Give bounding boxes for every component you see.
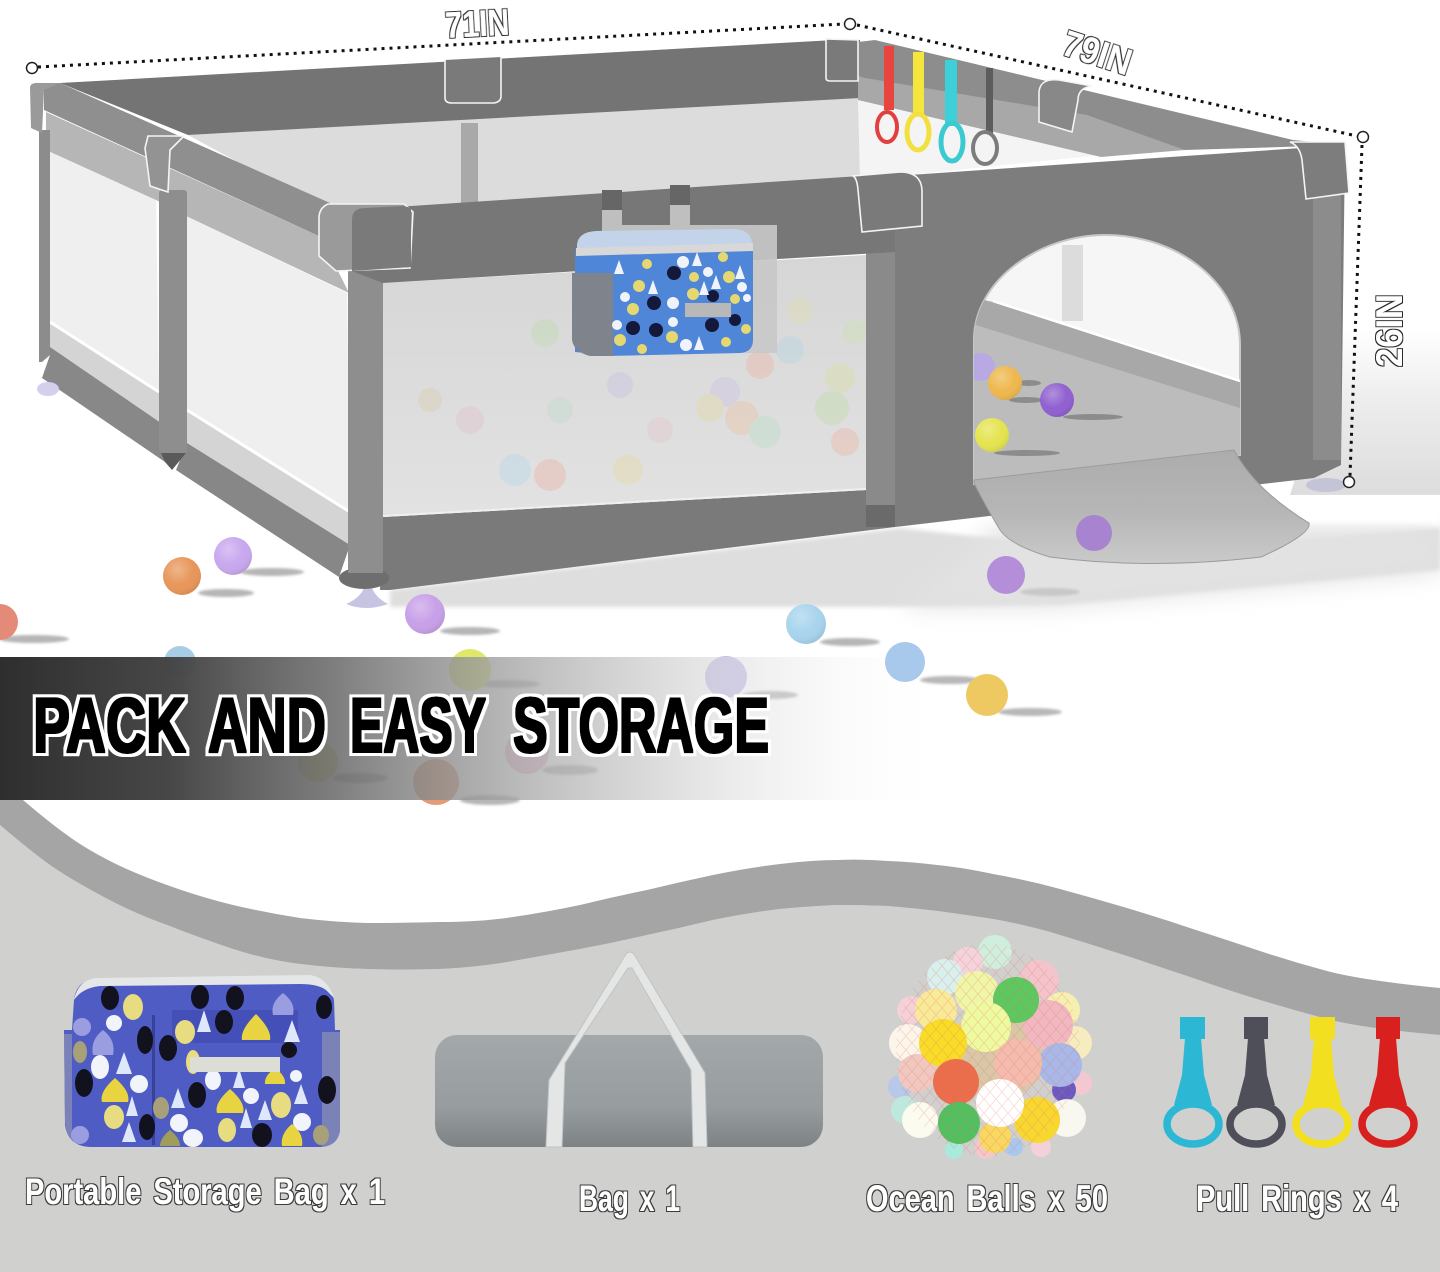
- bag lid: [577, 229, 752, 250]
- clip: right corner: [1290, 142, 1349, 199]
- door panel: [895, 145, 1345, 527]
- end point markers: [26, 18, 1368, 488]
- floor shadow around playpen: [390, 330, 1440, 607]
- wave: dark grey band: [0, 800, 1440, 1035]
- left near dark band: [176, 443, 350, 577]
- back wall top rail: [60, 40, 860, 135]
- depth label: 79IN: [1058, 23, 1137, 83]
- clip: back right: [826, 39, 858, 81]
- teal hanging ring: [941, 60, 963, 161]
- left rail light strip: [46, 112, 349, 293]
- back mesh wall: [188, 97, 860, 212]
- storage bag window: [606, 225, 777, 353]
- ball shadows: [0, 568, 1080, 805]
- floor through door: [974, 325, 1240, 480]
- dotted lines: [38, 24, 1362, 476]
- right wall inside rail: [858, 40, 1345, 150]
- storage bag side pockets: [64, 1032, 340, 1147]
- label: portable storage bag: Portable Storage Bag x 1: [25, 1171, 385, 1212]
- red hanging ring: [877, 46, 897, 142]
- item: ocean ball pile: [888, 935, 1092, 1159]
- clip: back rail middle: [445, 57, 501, 103]
- near foot suction: [346, 588, 388, 608]
- far mesh post through door: [1062, 245, 1083, 321]
- loose balls on floor: [0, 537, 1080, 805]
- left far light strip: [50, 322, 161, 423]
- left centre post: [159, 190, 187, 453]
- teal pull ring: [1167, 1017, 1219, 1144]
- ball on flap: [1076, 515, 1112, 551]
- front panel lower band: [380, 490, 895, 590]
- label: ocean balls: Ocean Balls x 50: [866, 1178, 1108, 1219]
- balls through door: [967, 353, 1074, 452]
- storage bag zipper top: [74, 975, 334, 1000]
- tote handle: [546, 952, 707, 1147]
- small hanging storage bag: [572, 229, 753, 356]
- right wall inside mesh: [858, 100, 1101, 180]
- yellow hanging ring: [907, 52, 929, 150]
- red pull ring: [1362, 1017, 1414, 1144]
- dark grey pull ring: [1230, 1017, 1282, 1144]
- door arch opening: [974, 235, 1240, 484]
- storage bag top flap: [172, 1010, 298, 1043]
- bag straps: [602, 185, 690, 236]
- tote body: [435, 1035, 823, 1147]
- heading: AND: [208, 681, 326, 769]
- mesh base white lines: [50, 322, 350, 512]
- bag front zipper: [685, 303, 731, 317]
- banner background: [0, 657, 950, 800]
- left side panels: [37, 83, 350, 577]
- clip: front middle: [853, 172, 922, 232]
- heading: [33, 681, 769, 769]
- mesh base edge: [383, 489, 866, 516]
- grey hanging ring: [973, 68, 997, 164]
- clip: side rail: [145, 136, 184, 192]
- back wall mesh post: [461, 123, 478, 203]
- heading: STORAGE: [513, 681, 769, 769]
- left far mesh: [46, 150, 159, 392]
- net over balls: [896, 944, 1080, 1156]
- centre foot bracket: [866, 505, 895, 527]
- front panel mesh: [383, 255, 866, 517]
- near foot bracket: [339, 567, 389, 589]
- right wall light strip: [858, 74, 1185, 157]
- heading: EASY: [350, 681, 486, 769]
- foreground balls beside banner: [885, 642, 1062, 716]
- storage bag front zipper: [190, 1057, 280, 1072]
- left near mesh: [184, 215, 350, 512]
- storage bag print: [71, 985, 336, 1147]
- view through door: [974, 245, 1240, 480]
- hanging pull rings: [877, 46, 997, 164]
- left far post: [39, 130, 50, 362]
- side mesh pocket: [572, 273, 613, 356]
- right door post: [1313, 190, 1341, 460]
- left rail face: [44, 83, 330, 237]
- inner white line: [993, 301, 1240, 381]
- storage bag body: [64, 978, 340, 1147]
- balls seen through mesh: [418, 297, 867, 491]
- door flap mesh: [974, 450, 1309, 564]
- clip: near corner: [319, 204, 413, 271]
- heading: PACK: [33, 681, 186, 769]
- far wall band through door: [976, 300, 1240, 408]
- clip: right rail: [1039, 80, 1092, 132]
- left centre foot: [161, 453, 186, 470]
- dimension lines: [26, 2, 1410, 488]
- clip: left corner: [30, 83, 60, 133]
- item: carry bag: [435, 952, 823, 1147]
- near corner post: [348, 268, 383, 573]
- height label: 26IN: [1369, 294, 1410, 367]
- left near light strip: [187, 410, 350, 545]
- front top rail: [322, 174, 895, 283]
- item: pull rings: [1167, 1017, 1414, 1144]
- playpen illustration: [30, 39, 1349, 608]
- label: bag: Bag x 1: [579, 1178, 680, 1219]
- width label: 71IN: [444, 2, 510, 46]
- bag print: [612, 252, 751, 354]
- centre post: [866, 230, 895, 505]
- storage bag pocket seam: [152, 1015, 155, 1145]
- bag body: [575, 246, 753, 356]
- item: portable storage bag: [64, 975, 340, 1147]
- bag zipper band: [576, 243, 753, 256]
- ball shadows through door: [994, 380, 1123, 456]
- left far dark band: [42, 347, 165, 462]
- far foot suction: [37, 382, 59, 396]
- wave: lower light grey panel: [0, 825, 1440, 1272]
- yellow pull ring: [1296, 1017, 1348, 1144]
- right corner foot: [1306, 478, 1346, 492]
